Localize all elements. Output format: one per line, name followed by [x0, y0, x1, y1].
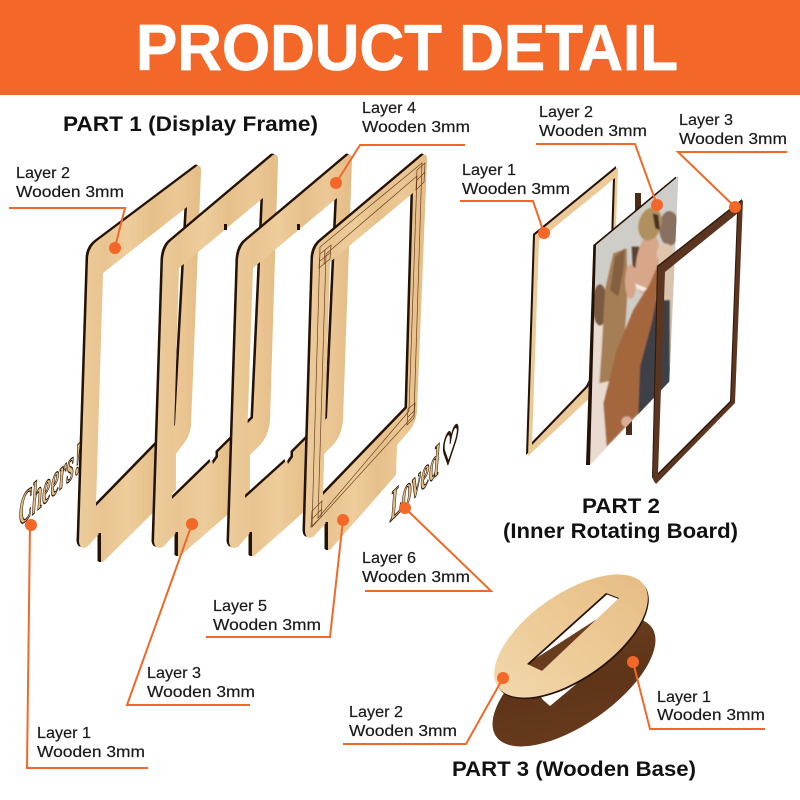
label: part 1 layer 3	[127, 518, 255, 705]
label: part 2 layer 1	[460, 162, 570, 239]
label: part 3 layer 2: Layer 2	[349, 704, 403, 721]
label: part 1 layer 3: Wooden 3mm	[147, 684, 255, 701]
heading: part 2: PART 2	[582, 495, 660, 518]
label: part 2 layer 2: Wooden 3mm	[539, 123, 647, 140]
label: part 3 layer 1: Wooden 3mm	[657, 707, 765, 724]
panel: part 2 inner rotating board	[526, 166, 743, 484]
label: part 2 layer 3: Wooden 3mm	[679, 131, 787, 148]
label: part 1 layer 6: Layer 6	[362, 550, 416, 567]
label: part 1 layer 4	[330, 100, 470, 189]
frame layer 6 with engraved border	[302, 154, 427, 550]
heading: part 2	[503, 495, 738, 543]
upper maple oval with slot	[494, 574, 649, 699]
panel: part 3 wooden base	[472, 574, 676, 771]
label: part 1 layer 5: Wooden 3mm	[213, 617, 321, 634]
text cutout: Loved: Loved♡	[389, 416, 458, 532]
label: part 3 layer 2: Wooden 3mm	[349, 723, 457, 740]
frame layer 5	[226, 154, 352, 556]
label: part 2 layer 2: Layer 2	[539, 104, 593, 121]
label: part 1 layer 1: Wooden 3mm	[37, 744, 145, 761]
panel: part 1 display frame layers	[19, 154, 458, 562]
label: part 1 layer 2: Layer 2	[16, 165, 70, 182]
label: part 2 layer 2	[536, 104, 663, 211]
label: part 2 layer 1: Layer 1	[462, 162, 516, 179]
photo board	[586, 176, 678, 465]
label: part 1 layer 2	[9, 165, 125, 254]
label: part 1 layer 1	[25, 519, 148, 768]
label: part 2 layer 1: Wooden 3mm	[462, 181, 570, 198]
label: part 2 layer 3: Layer 3	[679, 112, 733, 129]
frame layer 3	[152, 154, 278, 556]
text cutout: Cheers: Cheers!	[19, 431, 81, 537]
label: part 1 layer 6: Wooden 3mm	[362, 569, 470, 586]
lower walnut oval	[472, 593, 676, 771]
label: part 1 layer 5: Layer 5	[213, 598, 267, 615]
label: part 1 layer 4: Layer 4	[362, 100, 416, 117]
label: part 3 layer 2	[343, 672, 509, 744]
dark wood frame	[652, 199, 743, 484]
title: PRODUCT DETAIL	[136, 12, 678, 84]
label: part 1 layer 3: Layer 3	[147, 665, 201, 682]
heading: part 3: PART 3 (Wooden Base)	[452, 758, 696, 781]
label: part 3 layer 1: Layer 1	[657, 689, 711, 706]
label: part 1 layer 6	[362, 502, 491, 591]
label: part 1 layer 4: Wooden 3mm	[362, 119, 470, 136]
header banner	[0, 0, 800, 95]
label: part 2 layer 3	[678, 112, 787, 213]
rotating pin	[626, 193, 641, 435]
label: part 1 layer 1: Layer 1	[37, 725, 91, 742]
label: part 1 layer 2: Wooden 3mm	[16, 184, 124, 201]
heading: part 2: (Inner Rotating Board)	[503, 520, 738, 543]
label: part 1 layer 5	[206, 514, 349, 637]
light wood frame	[526, 166, 618, 456]
label: part 3 layer 1	[627, 656, 765, 729]
heading: part 1: PART 1 (Display Frame)	[63, 113, 318, 136]
frame layer 2	[76, 165, 201, 562]
